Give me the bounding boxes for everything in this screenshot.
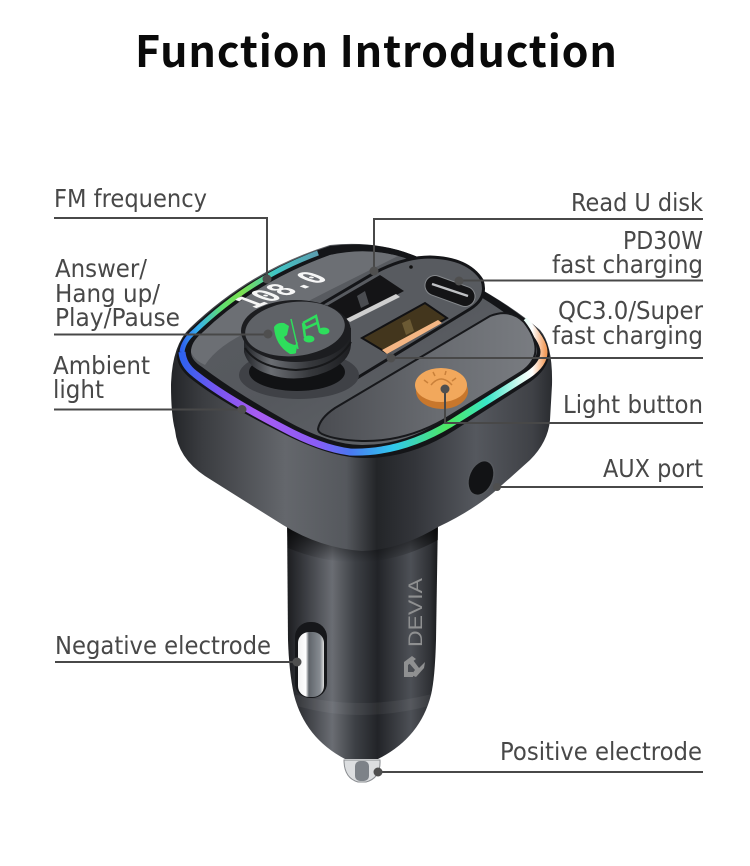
- slot: negative electrode: [295, 622, 327, 698]
- callout: Read U disk: [370, 188, 703, 276]
- callout: FM frequency: FM frequency: [54, 184, 207, 213]
- port hub: [245, 257, 484, 396]
- callout: Answer / Hang up / Play / Pause: Play/Pause: [55, 303, 180, 332]
- LED ring upper: [182, 253, 318, 352]
- callout: Positive electrode: Positive electrode: [500, 737, 702, 766]
- callout: PD30W fast charging: [454, 226, 703, 286]
- charger stem: [287, 515, 438, 759]
- LED ring lower right: [349, 320, 544, 452]
- callout: Answer / Hang up / Play / Pause: Answer/: [55, 254, 148, 283]
- USB-C port: [422, 273, 478, 309]
- USB port QC3.0: [362, 303, 447, 354]
- callout: AUX port: [493, 454, 703, 491]
- right lower panel: [318, 313, 536, 441]
- callout: QC3.0 Super fast charging: fast charging: [552, 321, 703, 350]
- charger body side: [171, 244, 552, 551]
- callout: Light button: [440, 384, 703, 423]
- callout: Read U disk: Read U disk: [571, 188, 703, 217]
- callout: PD30W fast charging: fast charging: [552, 250, 703, 279]
- callout: Light button: Light button: [563, 390, 703, 419]
- top face: [177, 244, 549, 458]
- callout: Ambient light: light: [53, 375, 104, 404]
- callout: QC3.0 Super fast charging: QC3.0/Super: [558, 296, 704, 325]
- left display panel: [191, 251, 398, 365]
- phone and music icon: [274, 316, 330, 354]
- callout: QC3.0 Super fast charging: [386, 296, 704, 362]
- DEVIA logo text: DEVIA: [406, 578, 427, 647]
- digital display: 108.0: [227, 268, 338, 312]
- callout: Answer / Hang up / Play / Pause: Hang up/: [55, 279, 161, 308]
- callout: Negative electrode: Negative electrode: [55, 631, 271, 660]
- pinhole: [409, 265, 413, 269]
- DEVIA logo mark: [404, 656, 425, 677]
- car charger product illustration: [171, 244, 552, 782]
- title: Function Introduction: [135, 18, 617, 80]
- callout: Answer / Hang up / Play / Pause: [54, 254, 272, 338]
- callout: Ambient light: Ambient: [53, 351, 150, 380]
- AUX port: [463, 457, 499, 499]
- knob: [239, 297, 359, 399]
- callout: PD30W fast charging: PD30W: [623, 226, 703, 255]
- USB port read U disk: [325, 275, 404, 322]
- face plate: [191, 252, 537, 445]
- callout: Ambient light: [53, 351, 246, 414]
- LED ring lower left: [182, 352, 350, 452]
- callout: AUX port: AUX port: [603, 454, 703, 483]
- orange light button: [415, 368, 468, 409]
- callout: FM frequency: [54, 184, 272, 284]
- callout: Positive electrode: [374, 737, 703, 776]
- metal tip: positive electrode: [344, 760, 380, 782]
